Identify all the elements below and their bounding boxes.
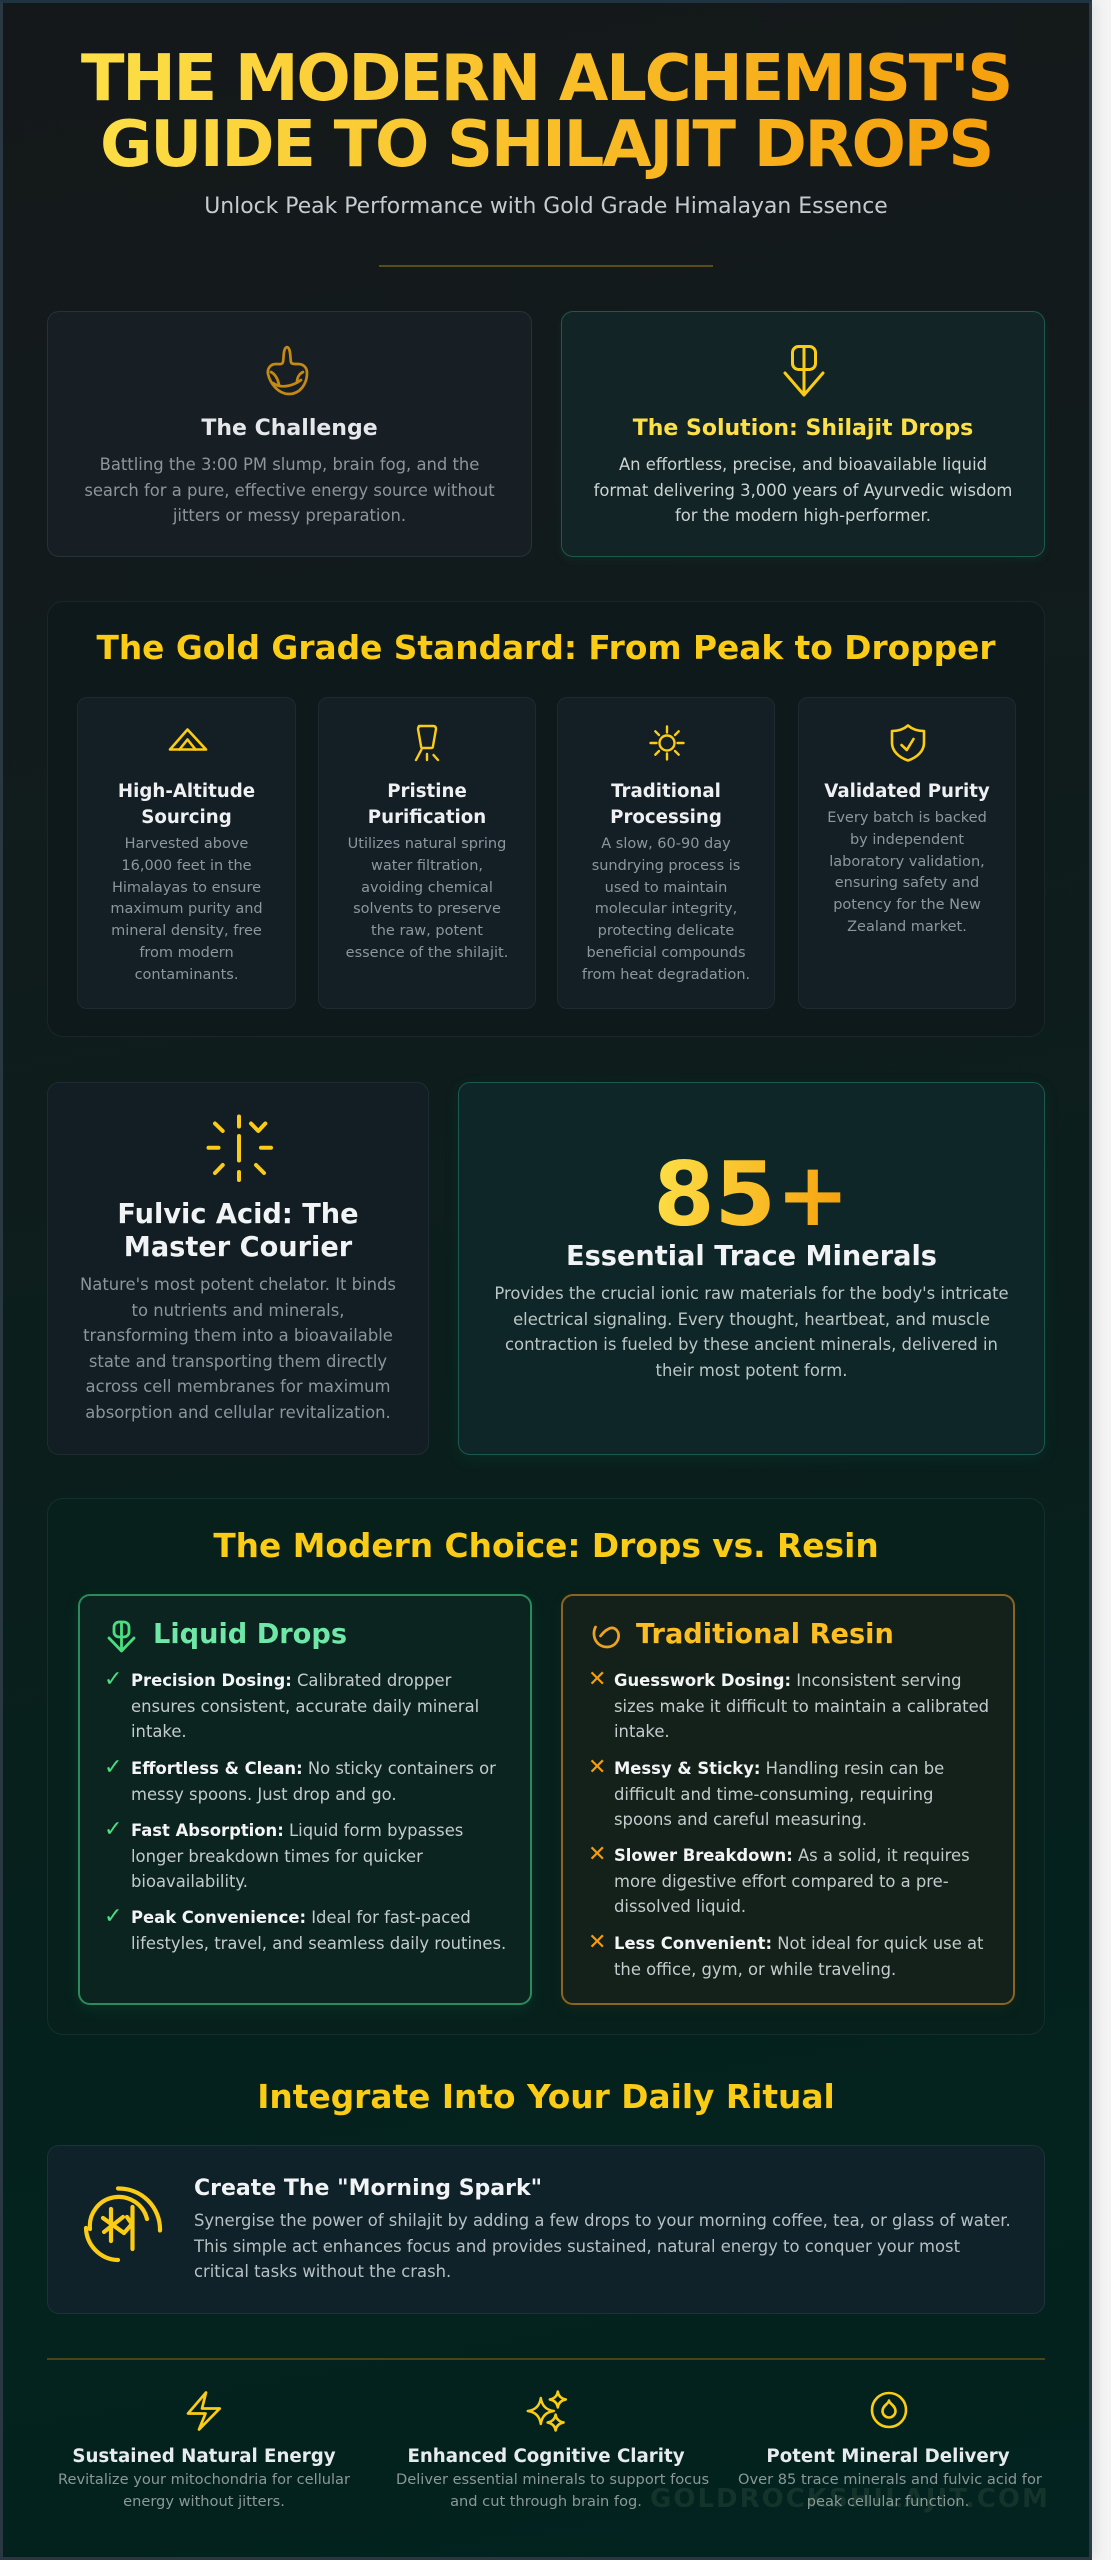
body [827, 810, 987, 935]
heading: The Challenge [201, 416, 378, 441]
item: ✕ [588, 1842, 606, 1867]
item [588, 1930, 984, 1979]
item: lifestyles, travel, and seamless daily routines. [131, 1934, 506, 1953]
body: 16,000 feet in the [121, 858, 252, 874]
body: state and transporting them directly [89, 1352, 387, 1370]
body: beneficial compounds [586, 945, 746, 961]
heading: Fulvic Acid: The [117, 1199, 359, 1230]
body: to nutrients and minerals, [132, 1300, 344, 1320]
heading [368, 781, 486, 828]
item: difficult and time-consuming, requiring [614, 1785, 933, 1804]
title [81, 42, 1011, 182]
item: Messy & Sticky: Handling resin can be [614, 1759, 944, 1778]
column: traditional resin [561, 1594, 1015, 2005]
body: Provides the crucial ionic raw materials for the body's intricate [494, 1284, 1009, 1303]
heading: Potent Mineral Delivery [766, 2446, 1010, 2467]
heading: Master Courier [124, 1232, 352, 1263]
body: used to maintain [605, 880, 727, 896]
item: Slower Breakdown: As a solid, it requires [614, 1846, 970, 1865]
item: Fast Absorption: Liquid form bypasses [131, 1821, 463, 1840]
icon: dropper with arrow [783, 345, 825, 397]
body: mineral density, free [111, 923, 262, 939]
body: across cell membranes for maximum [86, 1377, 390, 1396]
item: ✓ [104, 1817, 122, 1842]
icon: morning spark [84, 2186, 162, 2262]
heading [117, 1199, 359, 1263]
card: pristine purification [318, 697, 536, 1009]
body: Over 85 trace minerals and fulvic acid for [738, 2471, 1042, 2488]
body [80, 1275, 396, 1422]
item: Less Convenient: Not ideal for quick use at [614, 1934, 984, 1953]
heading [118, 781, 255, 828]
body: the raw, potent [371, 923, 483, 939]
heading: Create The "Morning Spark" [194, 2176, 542, 2201]
footer divider [47, 2358, 1045, 2360]
panel: the modern choice comparison [47, 1498, 1045, 2035]
item [104, 1667, 479, 1741]
item: more digestive effort compared to a pre- [614, 1872, 949, 1891]
item: ✕ [588, 1755, 606, 1780]
item [588, 1842, 970, 1916]
icon: resin swirl [592, 1626, 620, 1648]
body: electrical signaling. Every thought, heartbeat, and muscle [513, 1310, 990, 1328]
body [58, 2471, 350, 2510]
body: by independent [850, 832, 964, 848]
heading: Traditional [611, 781, 721, 802]
body text: format delivering 3,000 years of Ayurvedic wisdom [594, 480, 1012, 500]
body: potency for the New [833, 897, 981, 913]
body: Nature's most potent chelator. It binds [80, 1275, 396, 1294]
item [104, 1755, 496, 1804]
card: traditional processing [557, 697, 775, 1009]
item: Peak Convenience: Ideal for fast-paced [131, 1908, 471, 1927]
item: Effortless & Clean: No sticky containers or [131, 1759, 496, 1778]
body text [594, 455, 1012, 525]
icon: mineral drop in circle [869, 2390, 909, 2430]
body text [84, 455, 495, 525]
heading: High-Altitude [118, 781, 255, 802]
icon: mountain [168, 728, 208, 751]
header: title and subtitle [81, 42, 1011, 219]
body: Zealand market. [847, 919, 967, 935]
body: from modern [139, 945, 234, 961]
heading [610, 781, 722, 828]
heading: Purification [368, 807, 486, 828]
benefit: sustained natural energy [58, 2391, 350, 2510]
heading: Sustained Natural Energy [72, 2446, 336, 2467]
title: GUIDE TO SHILAJIT DROPS [100, 108, 992, 182]
body: Harvested above [125, 836, 248, 852]
body [346, 836, 508, 961]
body text: An effortless, precise, and bioavailable liquid [619, 455, 987, 474]
body: contraction is fueled by these ancient minerals, delivered in [505, 1335, 998, 1354]
body: peak cellular function. [807, 2493, 969, 2510]
body: solvents to preserve [353, 901, 501, 917]
item: ✕ [588, 1667, 606, 1692]
heading: Processing [610, 807, 722, 828]
body: Every batch is backed [827, 810, 987, 826]
panel: fulvic acid [47, 1082, 429, 1455]
heading: Traditional Resin [636, 1619, 894, 1650]
body: maximum purity and [110, 901, 263, 917]
item: longer breakdown times for quicker [131, 1847, 423, 1866]
benefit: potent mineral delivery [738, 2388, 1038, 2513]
body: from heat degradation. [582, 967, 750, 983]
body: Deliver essential minerals to support focus [396, 2471, 709, 2488]
panel: the challenge [47, 311, 532, 557]
item: ✕ [588, 1930, 606, 1955]
item: the office, gym, or while traveling. [614, 1960, 896, 1979]
icon: dropper with drops [414, 724, 440, 762]
body: transforming them into a bioavailable [83, 1326, 393, 1345]
body: protecting delicate [598, 923, 734, 939]
body: molecular integrity, [595, 901, 737, 917]
item: sizes make it difficult to maintain a calibrated [614, 1697, 989, 1716]
section heading: The Modern Choice: Drops vs. Resin [213, 1527, 879, 1565]
icon: shilajit drop with smile [266, 346, 308, 396]
item: ✓ [104, 1667, 122, 1692]
watermark: GOLDROCKSHILAJIT.COM [650, 2484, 1050, 2514]
body: ensuring safety and [835, 875, 979, 891]
item [588, 1667, 989, 1741]
body: laboratory validation, [829, 854, 985, 870]
body: water filtration, [371, 858, 483, 874]
item: intake. [131, 1722, 187, 1741]
card: validated purity [798, 697, 1016, 1009]
heading: Validated Purity [824, 781, 990, 802]
panel: the solution [561, 311, 1045, 557]
icon: sparkles [526, 2390, 568, 2432]
item: ✓ [104, 1904, 122, 1929]
body text: Battling the 3:00 PM slump, brain fog, and the [100, 455, 479, 474]
body [396, 2471, 709, 2510]
heading: Enhanced Cognitive Clarity [407, 2446, 685, 2467]
heading: Essential Trace Minerals [566, 1241, 937, 1272]
body [494, 1284, 1009, 1380]
body: This simple act enhances focus and provides sustained, natural energy to conquer your most [194, 2236, 960, 2256]
panel: the gold grade standard [47, 601, 1045, 1037]
item: dissolved liquid. [614, 1897, 746, 1916]
item: intake. [614, 1722, 670, 1741]
body [738, 2469, 1038, 2513]
body: their most potent form. [656, 1360, 847, 1380]
body: and cut through brain fog. [450, 2493, 642, 2510]
item: Precision Dosing: Calibrated dropper [131, 1671, 451, 1690]
icon: dropper with arrow [108, 1620, 136, 1652]
body [194, 2211, 1011, 2281]
card: high-altitude sourcing [77, 697, 296, 1009]
body [582, 836, 750, 983]
body: sundrying process is [592, 858, 740, 874]
icon: sun [649, 725, 685, 761]
heading: Pristine [387, 781, 467, 802]
section heading: The Gold Grade Standard: From Peak to Dropper [96, 629, 996, 667]
subtitle: Unlock Peak Performance with Gold Grade Himalayan Essence [204, 194, 888, 219]
body: absorption and cellular revitalization. [85, 1402, 391, 1422]
body: critical tasks without the crash. [194, 2262, 451, 2281]
panel: 85+ trace minerals [458, 1082, 1045, 1455]
icon: radiant spark [206, 1114, 273, 1182]
item [104, 1817, 463, 1891]
item [588, 1755, 944, 1829]
heading: Liquid Drops [153, 1619, 347, 1650]
title: THE MODERN ALCHEMIST'S [81, 42, 1011, 116]
body: Utilizes natural spring [348, 836, 506, 852]
item: spoons and careful measuring. [614, 1810, 867, 1829]
body text: for the modern high-performer. [675, 506, 931, 525]
heading: The Solution: Shilajit Drops [633, 416, 973, 441]
body: essence of the shilajit. [346, 945, 508, 961]
body text: search for a pure, effective energy source without [84, 480, 495, 500]
body [110, 836, 263, 983]
benefit: enhanced cognitive clarity [396, 2390, 709, 2510]
icon: lightning bolt [186, 2391, 222, 2431]
item [104, 1904, 506, 1953]
body: A slow, 60-90 day [601, 836, 731, 852]
heading: Sourcing [141, 807, 232, 828]
item: Guesswork Dosing: Inconsistent serving [614, 1671, 961, 1690]
header divider [379, 265, 713, 267]
body: Revitalize your mitochondria for cellular [58, 2471, 350, 2488]
body: Synergise the power of shilajit by adding a few drops to your morning coffee, tea, or glass of water. [194, 2211, 1011, 2230]
item: messy spoons. Just drop and go. [131, 1785, 397, 1804]
section heading: daily ritual: Integrate Into Your Daily Ritual [257, 2078, 835, 2116]
body: avoiding chemical [361, 880, 493, 896]
body: Himalayas to ensure [112, 880, 261, 896]
body: contaminants. [135, 967, 238, 983]
body text: jitters or messy preparation. [173, 506, 406, 525]
icon: shield with check [890, 724, 926, 762]
item: ✓ [104, 1755, 122, 1780]
item: ensures consistent, accurate daily mineral [131, 1697, 479, 1716]
body: energy without jitters. [123, 2493, 285, 2510]
item: bioavailability. [131, 1872, 248, 1891]
panel: morning spark [47, 2145, 1045, 2314]
column: liquid drops [78, 1594, 532, 2005]
big stat: 85+ [653, 1143, 850, 1246]
